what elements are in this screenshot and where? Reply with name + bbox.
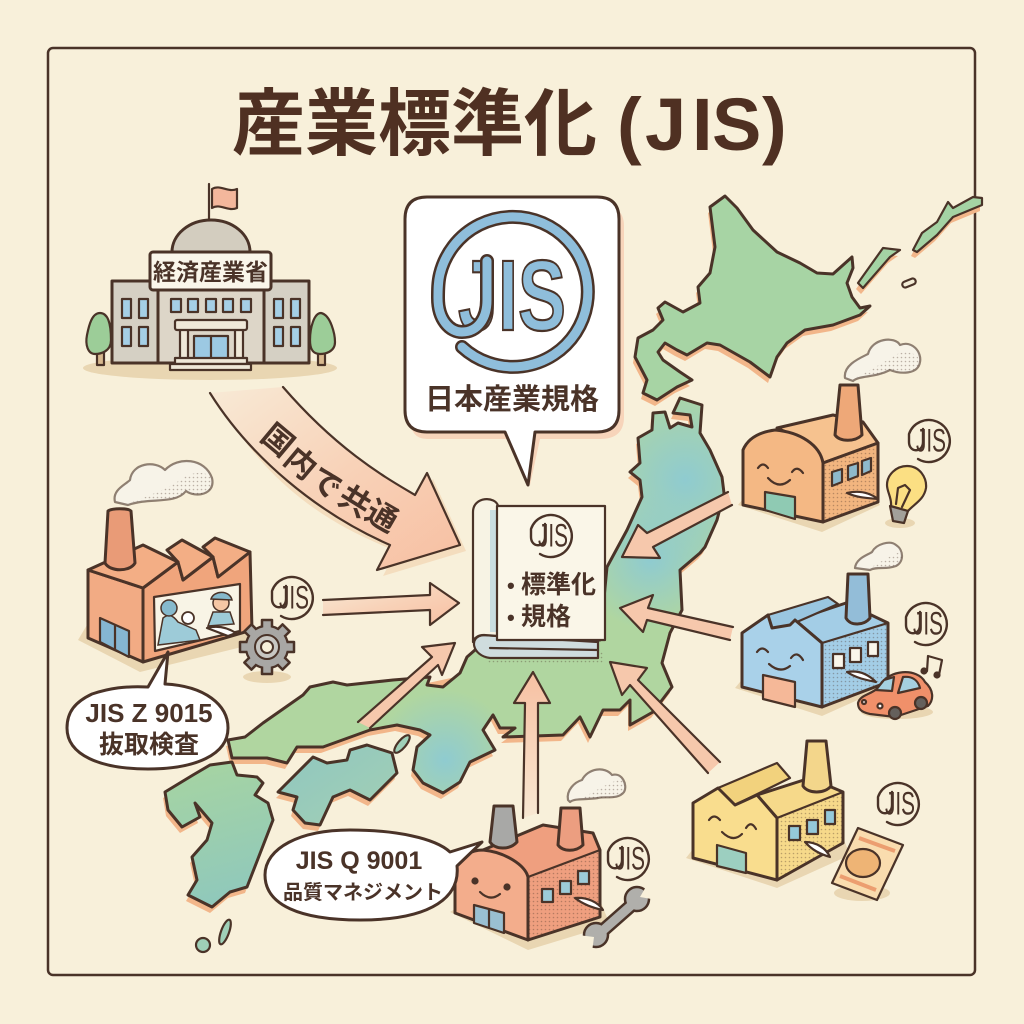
speech swoosh: [847, 671, 876, 682]
arrow from factory 1: [323, 583, 459, 625]
arrow label: 通: [360, 494, 404, 539]
wrench: [578, 878, 657, 952]
windows: [789, 810, 835, 840]
door: [100, 618, 129, 657]
chimney: [846, 574, 870, 624]
JIS mark: factory 3: [906, 603, 947, 645]
book JIS mark: JIS: [538, 518, 568, 554]
arrow from factory 5: [514, 672, 550, 818]
JIS mark: factory 4: JIS: [885, 786, 915, 822]
callout: JIS mark: [405, 197, 624, 485]
Kyushu: [165, 762, 273, 907]
roof: [718, 763, 790, 805]
callout: JIS Q 9001: JIS Q 9001: [296, 847, 422, 875]
ministry sign: [150, 252, 271, 290]
chimney: [835, 385, 862, 440]
speech swoosh: [847, 492, 878, 499]
speech swoosh: [805, 842, 830, 857]
title: 産業標準化: [232, 84, 597, 165]
door: [765, 492, 795, 519]
book text: 標準化: [521, 571, 596, 599]
factory 1: inspection: [78, 461, 262, 672]
JIS mark: factory 2: JIS: [916, 422, 946, 458]
callout label: 日本産業規格: [425, 383, 599, 416]
map shadow: [163, 202, 980, 913]
smoke: [845, 340, 920, 381]
door: [717, 845, 746, 873]
JIS mark: factory 5: [608, 838, 649, 880]
face: [472, 878, 510, 898]
JIS logo: JIS: [458, 240, 566, 352]
callout: JIS Z 9015: 抜取検査: [99, 731, 199, 759]
Hokkaido: [635, 196, 870, 400]
ministry sign: 経済産業省: [153, 259, 268, 285]
chimney: [105, 509, 135, 570]
callout: JIS Z 9015: JIS Z 9015: [85, 698, 213, 728]
trees: [86, 313, 335, 365]
door: [763, 675, 795, 707]
JIS mark: factory 4: [878, 783, 919, 825]
side: [795, 603, 888, 707]
callout: JIS Z 9015: [67, 652, 228, 769]
callout: JIS Q 9001: 品質マネジメント: [283, 881, 443, 904]
smoke: [115, 461, 213, 505]
side: [823, 443, 878, 522]
factory 3: automobiles: [735, 543, 902, 716]
face: [757, 648, 803, 670]
factory 5: machinery: [450, 769, 625, 950]
windows: [122, 299, 300, 346]
entrance: [170, 320, 251, 370]
callout: JIS Q 9001: [265, 830, 482, 920]
front: [742, 615, 822, 707]
windows: [542, 871, 589, 902]
chimney: [803, 741, 831, 792]
face: [758, 464, 803, 485]
dome: [172, 220, 250, 252]
JIS mark: factory 1: JIS: [279, 580, 309, 616]
Kuril islands: [858, 197, 982, 288]
arrow label: [255, 417, 404, 539]
face: [709, 816, 756, 838]
roof: [777, 415, 878, 463]
arrow label: 共: [332, 478, 377, 524]
flag: [209, 184, 237, 222]
book text line 2: •: [507, 605, 515, 630]
smoke: [855, 543, 902, 570]
Shikoku: [278, 745, 397, 825]
chimneys: [490, 806, 517, 848]
roof: [768, 597, 838, 628]
side: [483, 825, 600, 940]
arrow from southwest: [358, 643, 455, 728]
book text: •: [507, 573, 515, 598]
roof teeth: [203, 538, 250, 577]
gear: [240, 620, 294, 683]
door: [474, 905, 504, 933]
snack bag: [832, 828, 903, 901]
JIS mark: factory 1: [272, 577, 313, 619]
JIS mark: factory 3: JIS: [913, 606, 943, 642]
walls: [143, 552, 252, 662]
front: [693, 788, 777, 880]
Honshu: [226, 396, 726, 794]
windows: [833, 642, 878, 668]
ministry building: [83, 184, 337, 380]
map of Japan: [163, 196, 982, 952]
arrow from factory 2: [622, 492, 732, 558]
title: (JIS): [617, 83, 787, 166]
small islands: [196, 733, 412, 952]
arrow label: 内: [278, 440, 324, 487]
book text line 2: 規格: [521, 603, 571, 631]
arrows into the book: [323, 492, 733, 818]
front: [743, 430, 823, 522]
arrow from factory 3: [620, 595, 733, 640]
big arrow: shared nationwide: [210, 387, 466, 576]
front: [455, 850, 528, 940]
factory 4: food: [686, 741, 850, 888]
book JIS mark: [531, 515, 572, 557]
JIS logo: [438, 217, 588, 367]
arrow label: で: [303, 460, 349, 507]
JIS mark: factory 2: [909, 420, 950, 462]
arrow from factory 4: [610, 662, 720, 773]
windows: [832, 458, 871, 486]
light bulb: [885, 466, 926, 528]
speech swoosh: [575, 898, 603, 910]
inspection picture: [154, 584, 240, 651]
book: [473, 499, 605, 664]
side: [757, 778, 843, 880]
music note: [922, 656, 942, 678]
factory 2: electronics: [738, 340, 920, 532]
car: [858, 672, 933, 719]
wings: [112, 281, 158, 363]
JIS mark: factory 5: JIS: [615, 840, 645, 876]
arrow label: 国: [255, 417, 301, 464]
smoke: [568, 769, 625, 802]
